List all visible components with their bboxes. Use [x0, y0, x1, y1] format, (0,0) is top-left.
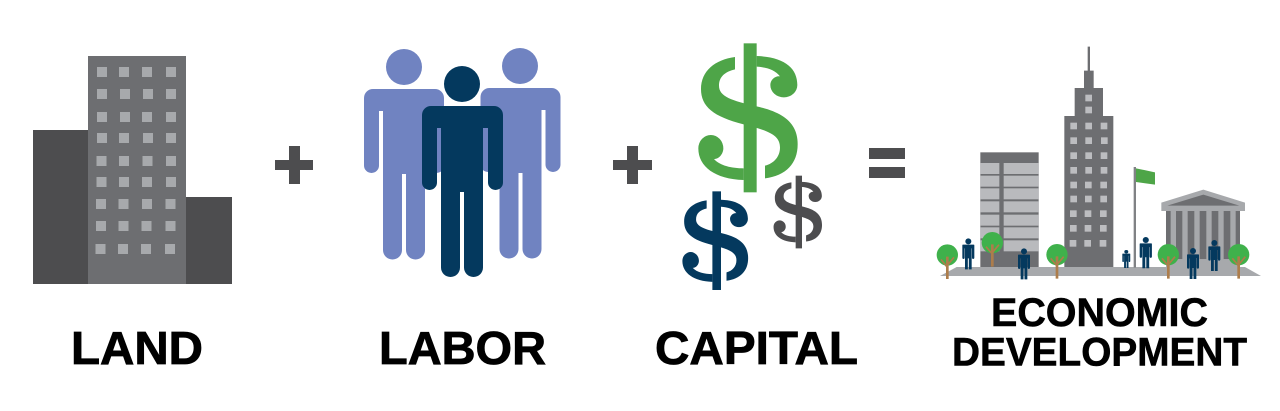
skyscraper [1064, 47, 1113, 267]
label: capital: CAPITAL [655, 322, 858, 374]
equals sign [869, 148, 905, 178]
label: development: DEVELOPMENT [952, 330, 1247, 374]
small people [962, 237, 1220, 279]
label: land: LAND [71, 322, 203, 374]
plaza ground [940, 267, 1261, 276]
icon: city economic development [937, 47, 1261, 279]
plus sign 2 [613, 146, 652, 184]
icon: capital money symbols [682, 43, 822, 290]
civic building with columns [1161, 190, 1245, 267]
icon: land buildings [33, 56, 232, 284]
label: labor: LABOR [379, 322, 546, 374]
label: economic: ECONOMIC [991, 291, 1208, 335]
office building [980, 152, 1039, 267]
plus sign 1 [275, 146, 313, 184]
flag [1134, 167, 1155, 268]
trees [937, 232, 1249, 279]
icon: labor people [364, 48, 560, 277]
